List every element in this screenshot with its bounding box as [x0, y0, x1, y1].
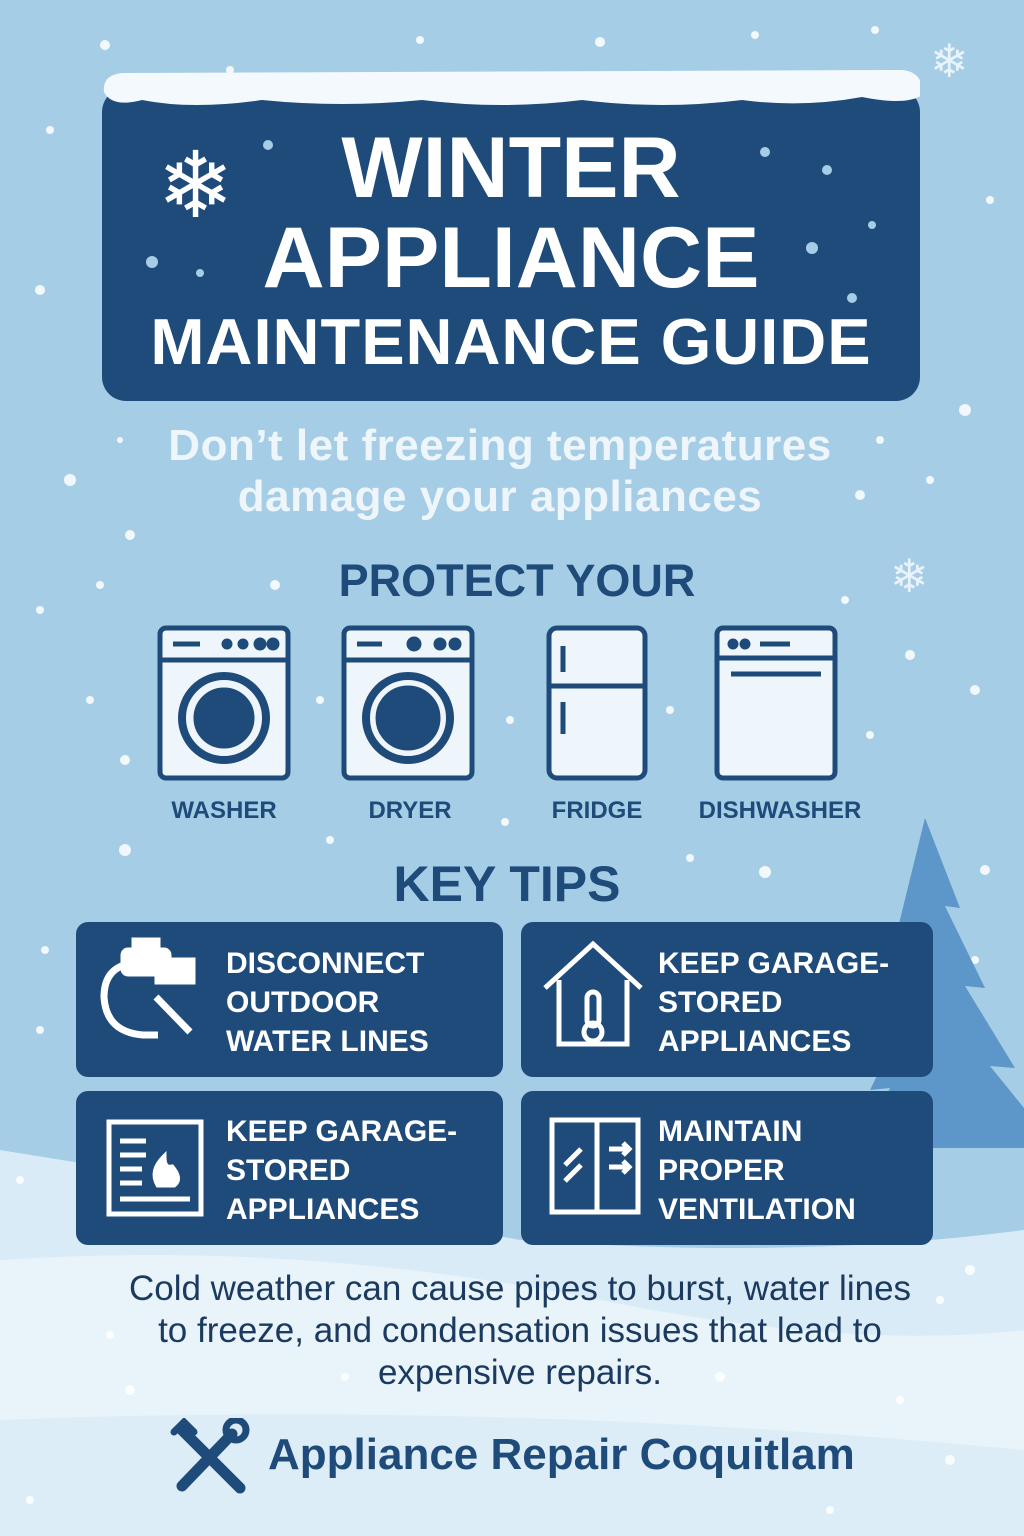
tip: ventilation: PROPER	[658, 1154, 785, 1187]
tree	[870, 818, 1024, 1148]
footer text: to freeze, and condensation issues that lead to	[158, 1311, 882, 1350]
icon: dishwasher	[717, 628, 835, 778]
icon: tools	[170, 1418, 250, 1494]
title	[150, 120, 872, 378]
subtitle	[168, 421, 832, 521]
footer text: Cold weather can cause pipes to burst, water lines	[129, 1269, 911, 1308]
tip: disconnect water lines: WATER LINES	[226, 1025, 429, 1058]
tip: garage-stored appliances 2	[76, 1091, 503, 1245]
title: MAINTENANCE GUIDE	[150, 305, 872, 378]
brand	[170, 1418, 855, 1494]
icons: appliances: DISHWASHER	[699, 797, 861, 824]
tip: disconnect water lines	[76, 922, 503, 1077]
subtitle: Don’t let freezing temperatures	[168, 421, 832, 470]
tip: ventilation	[521, 1091, 933, 1245]
tip: ventilation: MAINTAIN	[658, 1115, 802, 1148]
icon: snowflake: ❄	[157, 135, 234, 237]
footer text	[129, 1269, 911, 1392]
tip: disconnect water lines: OUTDOOR	[226, 986, 379, 1019]
icon: fridge	[549, 628, 645, 778]
icon: dryer	[344, 628, 472, 778]
footer text: expensive repairs.	[378, 1353, 662, 1392]
title: WINTER	[341, 120, 681, 216]
icons: appliances: WASHER	[171, 797, 277, 824]
tip: garage-stored appliances 2: APPLIANCES	[226, 1193, 419, 1226]
heading: protect your: PROTECT YOUR	[339, 555, 695, 606]
icons: appliances	[158, 626, 861, 824]
tip: garage-stored appliances 2: STORED	[226, 1154, 350, 1187]
tip: disconnect water lines: DISCONNECT	[226, 947, 424, 980]
tip: garage-stored appliances 1: STORED	[658, 986, 782, 1019]
text: ❄	[890, 550, 929, 602]
tip: garage-stored appliances 2: KEEP GARAGE-	[226, 1115, 457, 1148]
icons: appliances: FRIDGE	[552, 797, 642, 824]
subtitle: damage your appliances	[238, 472, 762, 521]
heading: key tips: KEY TIPS	[394, 856, 620, 912]
icon: washer	[160, 628, 288, 778]
title: APPLIANCE	[263, 210, 759, 306]
snowflake decorations: ❄	[930, 35, 969, 87]
title panel	[102, 70, 920, 401]
tip: ventilation: VENTILATION	[658, 1193, 856, 1226]
icons: appliances: DRYER	[368, 797, 452, 824]
brand: Appliance Repair Coquitlam	[268, 1430, 855, 1479]
tip: garage-stored appliances 1: APPLIANCES	[658, 1025, 851, 1058]
tip: garage-stored appliances 1: KEEP GARAGE-	[658, 947, 889, 980]
tip: garage-stored appliances 1	[521, 922, 933, 1077]
